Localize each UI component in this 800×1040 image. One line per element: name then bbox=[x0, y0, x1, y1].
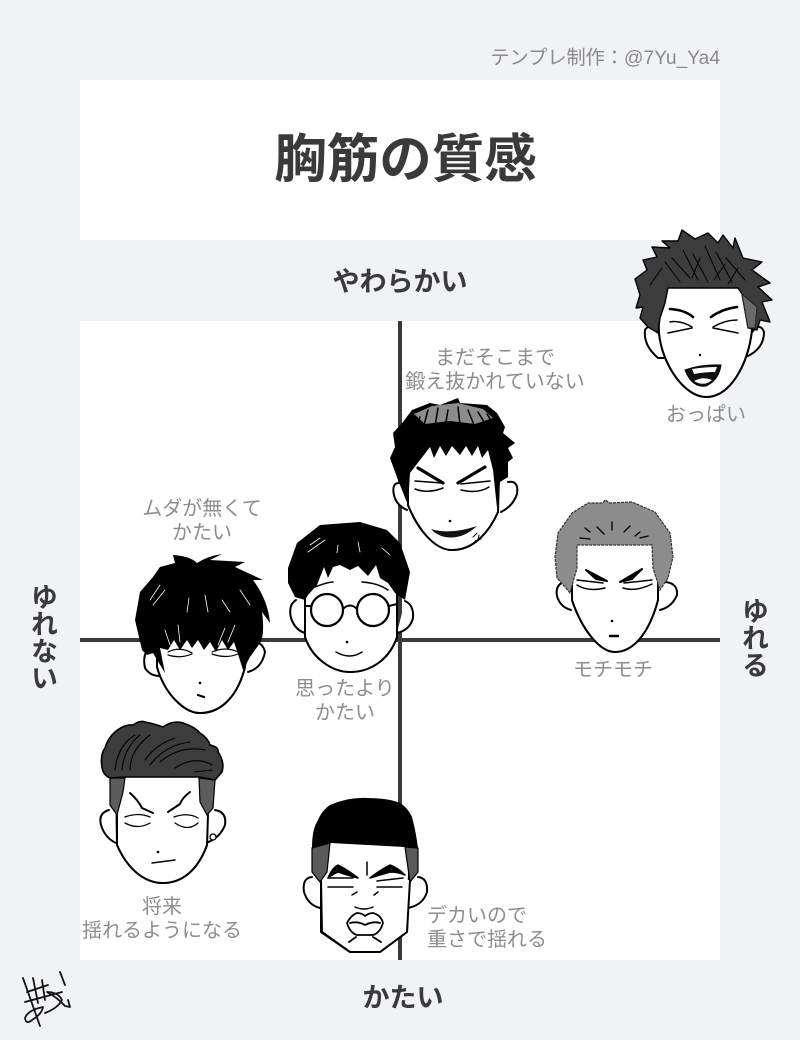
label: shourai: 将来 bbox=[142, 895, 182, 918]
title: 胸筋の質感 bbox=[274, 130, 537, 189]
axis label: left: ゆれない bbox=[27, 583, 57, 691]
label: shourai: 揺れるようになる bbox=[82, 919, 242, 942]
face: lower left, wavy hair bbox=[100, 721, 225, 883]
label: muda bbox=[142, 497, 262, 544]
label: oppai: おっぱい bbox=[666, 403, 746, 426]
face: left, messy fringe bbox=[135, 554, 270, 713]
label: shourai bbox=[82, 895, 242, 942]
label: omotta yori bbox=[295, 678, 395, 724]
label: dekai bbox=[427, 904, 547, 951]
face: centre top, smirking bbox=[390, 398, 517, 550]
credit line: テンプレ制作：@7Yu_Ya4 bbox=[490, 47, 720, 69]
label: muda: ムダが無くて bbox=[142, 497, 262, 520]
axis label: bottom: かたい bbox=[362, 983, 444, 1013]
chart panel bbox=[80, 321, 720, 960]
signature bbox=[23, 972, 70, 1026]
face: centre, round glasses bbox=[288, 522, 413, 672]
axis label: right: ゆれる bbox=[738, 597, 768, 678]
label: muda: かたい bbox=[172, 522, 232, 544]
label: omotta yori: かたい bbox=[315, 702, 375, 724]
label: top centre: 鍛え抜かれていない bbox=[405, 370, 585, 393]
axis label: top: やわらかい bbox=[332, 267, 468, 297]
label: mochimochi: モチモチ bbox=[573, 659, 653, 681]
title panel bbox=[80, 80, 720, 240]
label: top centre bbox=[405, 347, 585, 393]
label: dekai: 重さで揺れる bbox=[427, 928, 547, 951]
icon: earring bbox=[210, 834, 216, 840]
face: top right, laughing bbox=[635, 230, 772, 397]
face: bottom centre, flat top bbox=[304, 798, 427, 952]
label: dekai: デカいので bbox=[427, 904, 527, 927]
label: top centre: まだそこまで bbox=[435, 347, 555, 369]
face: right, grey crew cut bbox=[555, 500, 677, 652]
label: omotta yori: 思ったより bbox=[295, 678, 395, 700]
